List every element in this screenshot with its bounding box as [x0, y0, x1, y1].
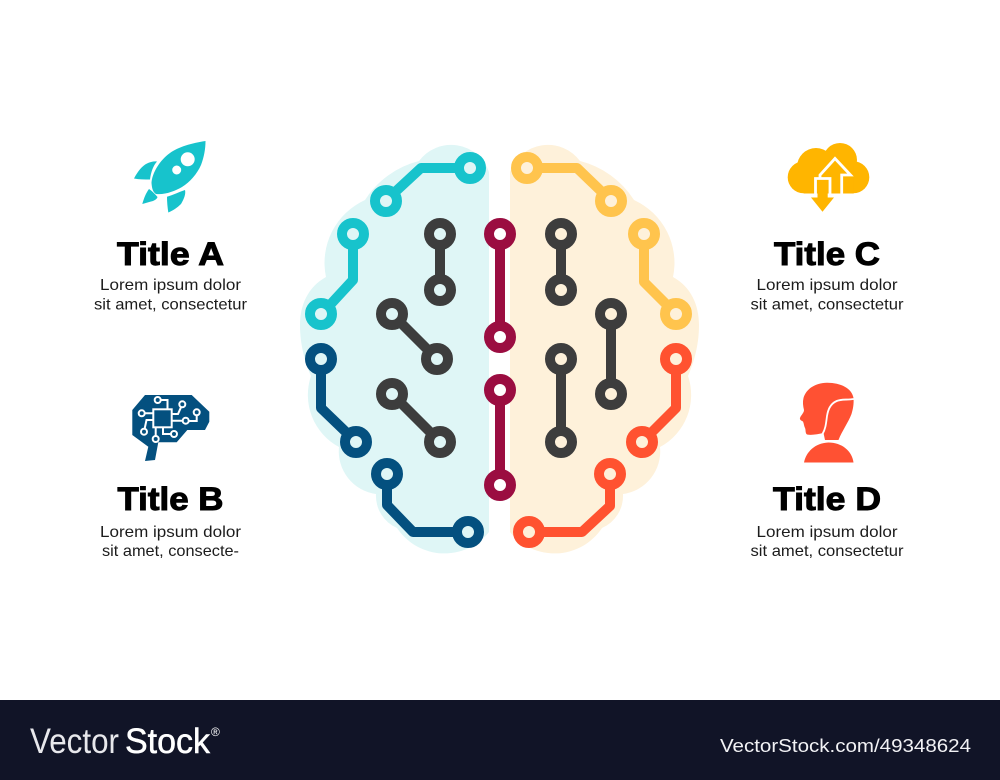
- panel: Title D block: [750, 383, 904, 560]
- panel: Title A block: [94, 141, 248, 314]
- heading: Title D: Title D: [773, 481, 881, 517]
- text: Title D description: sit amet, consectetur: [750, 543, 904, 560]
- circuit: teal upper trace: [375, 157, 481, 212]
- circuit: dark right traces: [550, 223, 622, 453]
- text: Title A description: [94, 277, 248, 314]
- circuit: red lower trace: [518, 463, 621, 543]
- text: Title D description: [750, 524, 904, 560]
- circuit: red upper trace: [631, 348, 687, 453]
- text: Title C description: sit amet, consectetur: [750, 296, 904, 314]
- heading: Title A: Title A: [117, 236, 224, 272]
- text: Title D description: Lorem ipsum dolor: [756, 524, 898, 541]
- circuit: crimson centre traces: [489, 223, 511, 496]
- heading: Title B: Title B: [118, 481, 224, 517]
- circuit: blue upper trace: [310, 348, 367, 453]
- heading: Title C: Title C: [774, 236, 880, 272]
- icon: human head profile: [800, 383, 854, 462]
- left brain hemisphere background: [300, 145, 489, 553]
- icon: circuit brain: [132, 395, 209, 461]
- icon: rocket: [134, 141, 206, 212]
- panel: brain diagram: [300, 145, 699, 553]
- text: Title C description: [750, 277, 904, 314]
- circuit: yellow upper trace: [516, 157, 622, 212]
- icon: cloud with arrows: [788, 143, 869, 212]
- logo: VectorStock wordmark: [30, 722, 220, 761]
- circuit: dark left traces: [381, 223, 451, 453]
- panel: Title B block: [100, 395, 242, 560]
- footer band: [0, 700, 1000, 780]
- text: image reference: VectorStock.com/49348624: [720, 736, 971, 756]
- right brain hemisphere background: [510, 145, 699, 553]
- text: Title B description: sit amet, consecte-: [102, 543, 239, 560]
- text: Title A description: sit amet, consectetur: [94, 296, 248, 314]
- text: Title B description: Lorem ipsum dolor: [100, 524, 242, 541]
- panel: Title C block: [750, 143, 904, 314]
- circuit: yellow lower trace: [633, 223, 687, 325]
- circuit: blue lower trace: [376, 463, 479, 543]
- text: Title A description: Lorem ipsum dolor: [100, 277, 242, 294]
- text: Title C description: Lorem ipsum dolor: [756, 277, 898, 294]
- logo: VectorStock wordmark: Stock: [125, 722, 210, 761]
- logo: VectorStock wordmark: ®: [211, 725, 220, 739]
- logo: VectorStock wordmark: Vector: [30, 722, 119, 761]
- text: Title B description: [100, 524, 242, 560]
- circuit: teal lower trace: [310, 223, 364, 325]
